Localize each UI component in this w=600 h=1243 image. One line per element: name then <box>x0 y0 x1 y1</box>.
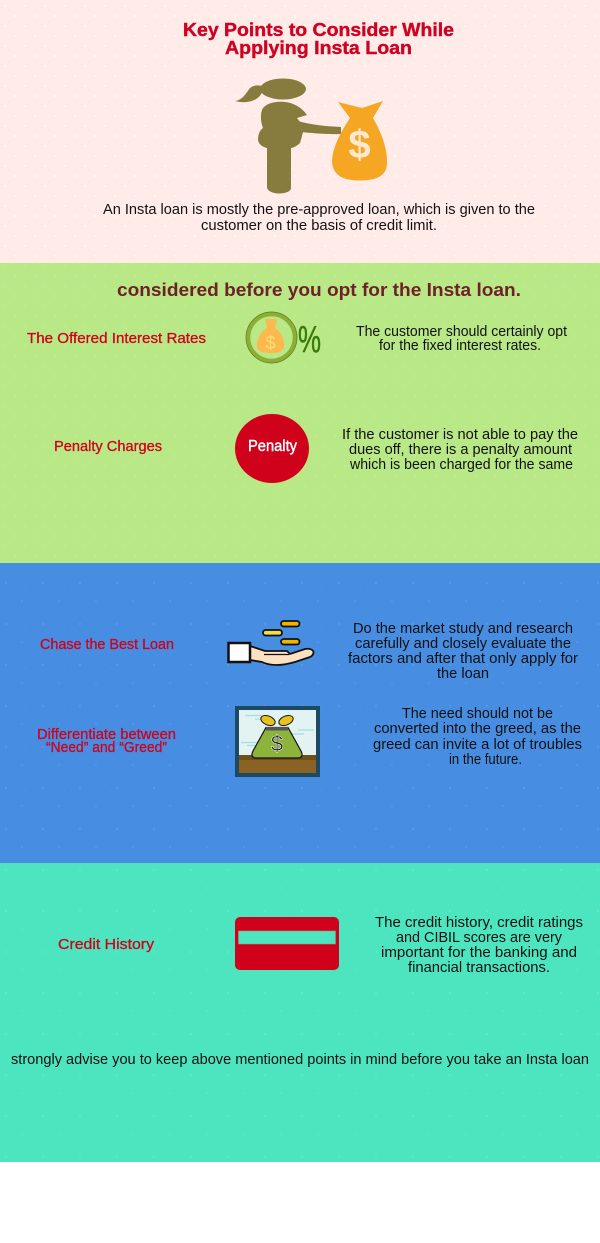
text: chase the best loan: the loan <box>437 666 489 682</box>
section heading: considered before you opt for the Insta loan. <box>117 279 521 300</box>
icon: money bag with sprout: $ <box>271 731 283 756</box>
text: credit history: important for the banking and <box>381 945 577 961</box>
text: chase the best loan: carefully and closely evaluate the <box>355 636 571 652</box>
text: interest rates <box>356 324 567 354</box>
label: chase the best loan: Chase the Best Loan <box>40 637 174 653</box>
text: penalty charges: which is been charged for the same <box>349 457 573 473</box>
panel: credit history <box>0 863 600 1162</box>
text: penalty charges <box>342 427 578 473</box>
icon: money bag with sprout <box>235 706 320 777</box>
text: credit history: financial transactions. <box>408 960 550 976</box>
label: need and greed: “Need” and “Greed” <box>46 740 167 756</box>
label: need and greed <box>37 727 176 756</box>
panel: interest rates and penalties <box>0 263 600 563</box>
icon: money bag with percent <box>246 312 321 363</box>
text: penalty charges: If the customer is not able to pay the <box>342 427 578 443</box>
icon: money bag with percent: % <box>298 319 321 361</box>
text: need and greed: The need should not be <box>402 706 553 722</box>
text: chase the best loan: Do the market study and research <box>353 621 573 637</box>
title: Applying Insta Loan <box>225 38 412 58</box>
closing advice text: strongly advise you to keep above mentioned points in mind before you take an Insta loan <box>11 1052 589 1068</box>
title: Key Points to Consider While <box>183 20 454 40</box>
label: need and greed: Differentiate between <box>37 727 176 743</box>
label: credit history: Credit History <box>58 937 155 953</box>
label: offered interest rates: The Offered Interest Rates <box>27 331 206 347</box>
panel: best loan and need vs greed <box>0 563 600 863</box>
text: chase the best loan: factors and after that only apply for <box>348 651 578 667</box>
text: need and greed <box>373 706 582 768</box>
intro text: An Insta loan is mostly the pre-approved loan, which is given to the <box>103 202 535 218</box>
title <box>183 20 454 58</box>
text: credit history <box>375 915 583 976</box>
icon: credit card <box>235 917 339 970</box>
intro text: customer on the basis of credit limit. <box>201 218 437 234</box>
icon: hand with coins <box>228 621 314 665</box>
text: credit history: and CIBIL scores are very <box>396 930 563 946</box>
text: credit history: The credit history, credit ratings <box>375 915 583 931</box>
text: interest rates: The customer should certainly opt <box>356 324 567 340</box>
label: penalty charges: Penalty Charges <box>54 439 162 455</box>
panel: introduction <box>0 0 600 263</box>
text: interest rates: for the fixed interest rates. <box>379 338 541 354</box>
text: need and greed: converted into the greed, as the <box>374 721 581 737</box>
icon: penalty badge: Penalty <box>248 438 297 455</box>
intro text <box>103 202 535 234</box>
icon: person holding money bag: $ <box>348 123 371 167</box>
text: need and greed: greed can invite a lot of troubles <box>373 737 582 753</box>
icon: person holding money bag <box>235 78 387 194</box>
icon: money bag with percent: $ <box>265 333 276 353</box>
icon: penalty badge <box>235 414 309 483</box>
text: need and greed: in the future. <box>449 752 522 768</box>
text: penalty charges: dues off, there is a penalty amount <box>349 442 572 458</box>
text: chase the best loan <box>348 621 578 682</box>
